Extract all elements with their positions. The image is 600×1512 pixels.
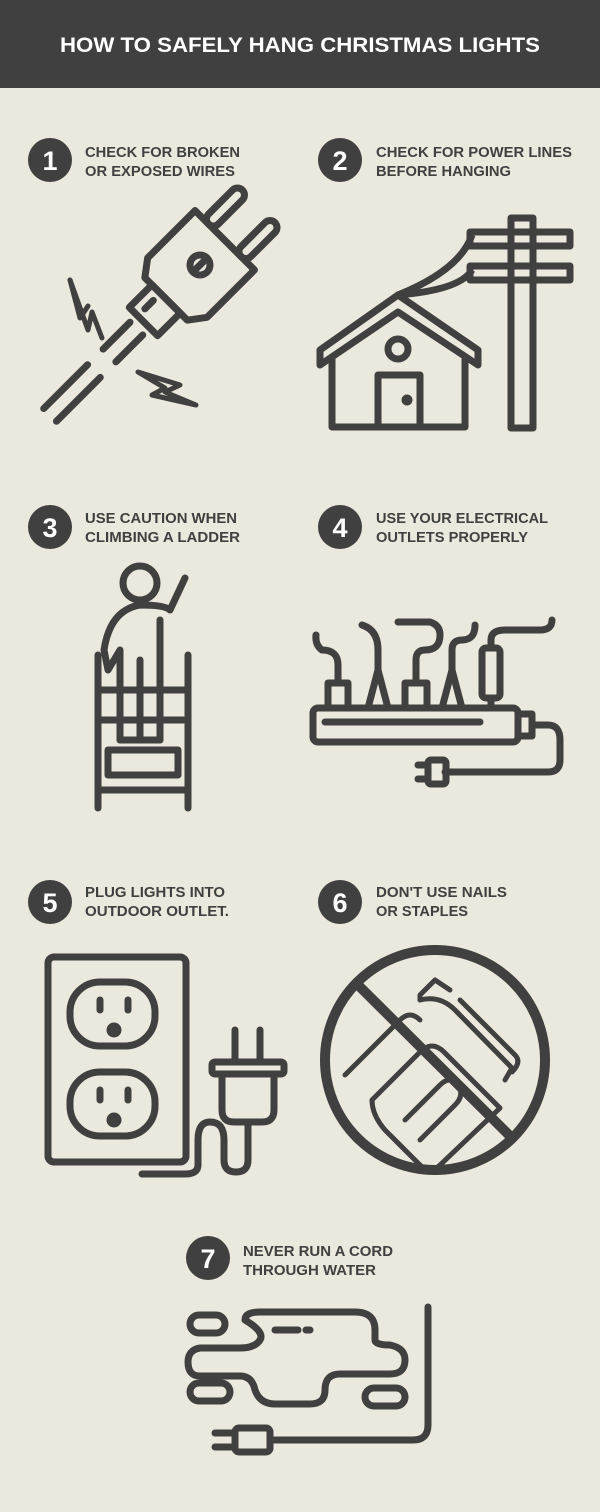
header: HOW TO SAFELY HANG CHRISTMAS LIGHTS [60, 34, 540, 57]
step 4 heading: USE YOUR ELECTRICAL [376, 511, 548, 527]
icon: person on ladder [98, 566, 188, 808]
step 3 heading [28, 505, 241, 549]
step 5 heading [28, 880, 229, 924]
icon: broken plug [20, 177, 288, 445]
icon: cord through water [188, 1307, 428, 1452]
step 6 heading [318, 880, 507, 924]
step 4 heading: OUTLETS PROPERLY [376, 530, 528, 546]
step 4 heading: 4 [332, 513, 348, 543]
icon: house and power pole [320, 218, 570, 428]
step 3 heading: USE CAUTION WHEN [85, 511, 237, 527]
step 6 heading: DON'T USE NAILS [376, 885, 507, 901]
header [0, 0, 600, 88]
step 2 heading [318, 138, 572, 182]
icon: no staples [325, 950, 545, 1170]
step 2 heading: CHECK FOR POWER LINES [376, 145, 572, 161]
step 1 heading: 1 [42, 146, 58, 176]
step 1 heading: OR EXPOSED WIRES [85, 164, 235, 180]
step 6 heading: 6 [332, 888, 348, 918]
step 3 heading: CLIMBING A LADDER [85, 530, 241, 546]
step 2 heading: BEFORE HANGING [376, 164, 511, 180]
step 7 heading: THROUGH WATER [243, 1263, 377, 1279]
step 7 heading [186, 1236, 393, 1280]
step 4 heading [318, 505, 548, 549]
step 5 heading: 5 [42, 888, 58, 918]
icon: wall outlet with plug [48, 957, 284, 1174]
icon: power strip [313, 620, 560, 784]
step 6 heading: OR STAPLES [376, 904, 468, 920]
step 7 heading: 7 [200, 1244, 216, 1274]
step 5 heading: OUTDOOR OUTLET. [85, 904, 229, 920]
step 5 heading: PLUG LIGHTS INTO [85, 885, 225, 901]
step 3 heading: 3 [42, 513, 58, 543]
step 1 heading [28, 138, 240, 182]
step 1 heading: CHECK FOR BROKEN [85, 145, 240, 161]
step 7 heading: NEVER RUN A CORD [243, 1244, 393, 1260]
step 2 heading: 2 [332, 146, 348, 176]
